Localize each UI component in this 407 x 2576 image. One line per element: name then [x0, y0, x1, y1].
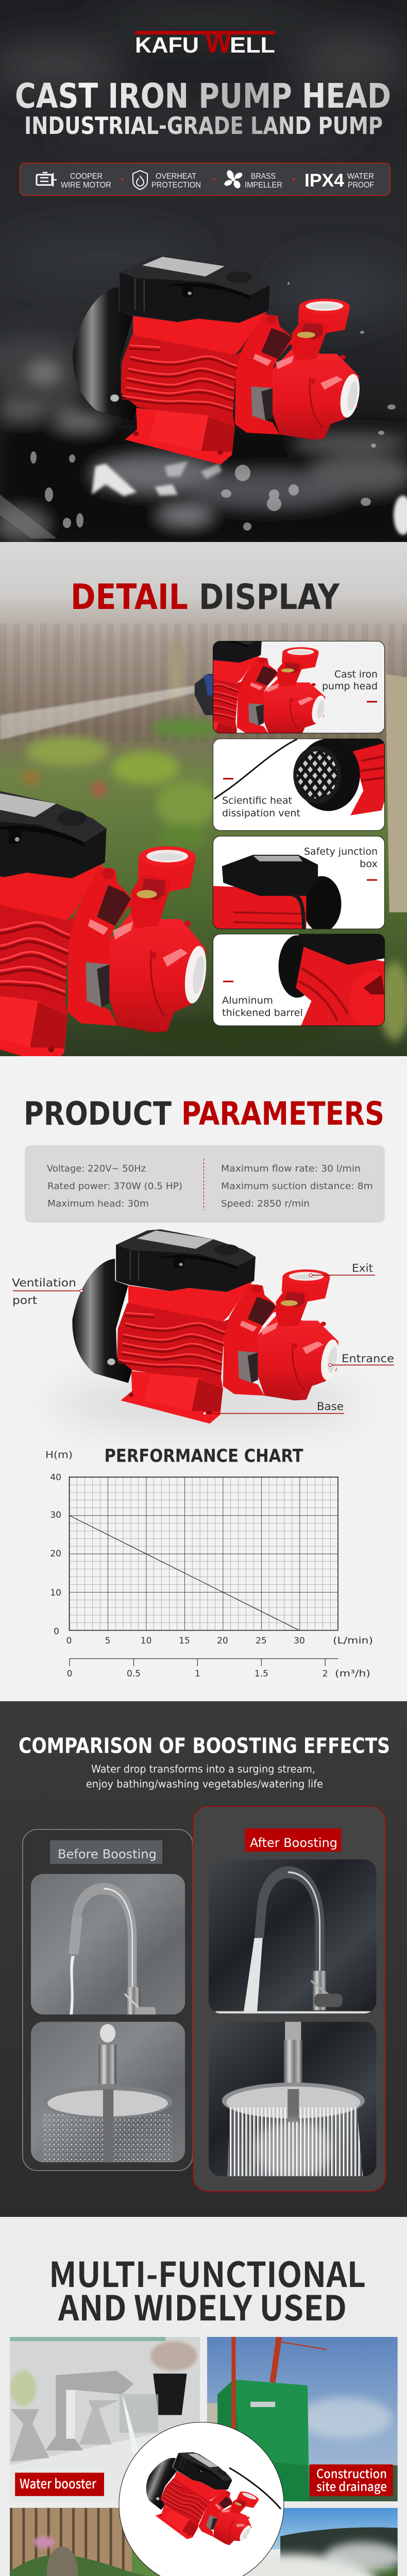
- label: cooper wire motor: COOPER: [70, 172, 103, 181]
- tag: before boosting: Before Boosting: [58, 1847, 157, 1861]
- icon: shield flame: [133, 171, 147, 190]
- close-up pump: [0, 789, 210, 1065]
- callout: base: [203, 1400, 344, 1415]
- performance chart: 5: [105, 1636, 110, 1646]
- label: brass impeller: IMPELLER: [245, 181, 282, 190]
- parameters section: [0, 1056, 407, 1701]
- detail section: [0, 542, 407, 1065]
- tag: after boosting: [245, 1828, 341, 1852]
- detail card: safety junction box: Safety junction: [304, 846, 378, 857]
- callout: ventilation port: Ventilation: [12, 1277, 76, 1289]
- label: IPX4 waterproof: WATER: [347, 172, 374, 181]
- comparison subtitle: Water drop transforms into a surging stream,: [91, 1763, 315, 1775]
- performance chart: 1.5: [255, 1669, 268, 1679]
- photo: irrigation: [244, 2508, 398, 2576]
- chart title: PERFORMANCE CHART: [104, 1446, 303, 1466]
- callout: ventilation port: port: [12, 1294, 37, 1307]
- detail card: cast iron pump head: pump head: [322, 681, 378, 692]
- callout: exit: Exit: [352, 1262, 373, 1275]
- specification box: [25, 1145, 385, 1223]
- hero pump: [73, 256, 363, 465]
- detail card: heat dissipation vent: Scientific heat: [222, 795, 292, 806]
- panel: before boosting: [23, 1829, 193, 2171]
- specification box: Voltage: 220V~ 50Hz: [47, 1164, 146, 1174]
- detail card: aluminum barrel: Aluminum: [222, 995, 273, 1006]
- comparison subtitle: enjoy bathing/washing vegetables/watering life: [86, 1777, 323, 1790]
- logo: KAFU: [135, 33, 199, 58]
- photo: construction site: [207, 2337, 398, 2501]
- label: cooper wire motor: WIRE MOTOR: [61, 181, 111, 190]
- performance chart: 30: [294, 1636, 305, 1646]
- label text: construction site drainage: Construction: [316, 2464, 387, 2482]
- label: brass impeller: BRASS: [251, 172, 276, 181]
- callout: entrance: [329, 1352, 394, 1366]
- before faucet image: [31, 1874, 185, 2017]
- applications title: [49, 2247, 366, 2331]
- photo: pond: [10, 2508, 160, 2576]
- tag: before boosting: [50, 1840, 162, 1864]
- comparison subtitle: [86, 1763, 323, 1790]
- performance chart: (L/min): [333, 1635, 373, 1646]
- detail card: cast iron pump head: Cast iron: [334, 669, 378, 680]
- detail title: DETAIL: [71, 577, 188, 618]
- detail card: safety junction box: box: [360, 858, 378, 870]
- detail card: heat dissipation vent: dissipation vent: [222, 808, 300, 819]
- callout: exit: [309, 1262, 375, 1277]
- detail card: heat dissipation vent: [213, 739, 385, 831]
- after faucet image: [209, 1859, 377, 2013]
- center pump circle: [119, 2422, 284, 2576]
- performance chart: 25: [256, 1636, 267, 1646]
- label: overheat protection: OVERHEAT: [156, 172, 196, 181]
- specification box: Maximum suction distance: 8m: [221, 1181, 373, 1192]
- detail title: DISPLAY: [199, 577, 340, 618]
- callout: entrance: Entrance: [342, 1352, 394, 1365]
- annotated pump: [12, 1229, 394, 1430]
- hero section: [0, 0, 407, 542]
- logo: [135, 26, 275, 59]
- performance chart: 30: [50, 1510, 61, 1520]
- applications title: MULTI-FUNCTIONAL: [49, 2247, 366, 2297]
- performance chart: 20: [50, 1549, 61, 1559]
- garden post: [385, 674, 407, 912]
- nozzle: [195, 674, 214, 715]
- performance chart: (m³/h): [335, 1668, 370, 1679]
- performance chart: 10: [141, 1636, 151, 1646]
- detail card: cast iron pump head: [213, 641, 385, 734]
- performance chart: [45, 1446, 373, 1679]
- performance chart: 0: [67, 1669, 72, 1679]
- photo: water booster faucet: [10, 2337, 200, 2501]
- feature band: [20, 163, 391, 196]
- comparison section: [0, 1701, 407, 2217]
- label: water booster: [15, 2472, 104, 2496]
- water spray: [0, 686, 195, 740]
- performance chart: 0.5: [127, 1669, 141, 1679]
- detail title: [71, 577, 340, 618]
- panel: after boosting: [193, 1806, 385, 2192]
- parameters title: PRODUCT: [24, 1095, 172, 1132]
- label: cooper wire motor: [61, 172, 111, 190]
- before shower image: [31, 2022, 185, 2163]
- tag: after boosting: After Boosting: [250, 1836, 337, 1850]
- performance chart: H(m): [45, 1449, 73, 1461]
- rock highlights: [92, 461, 407, 535]
- label: construction: [310, 2464, 393, 2496]
- performance chart: 2: [323, 1669, 328, 1679]
- wet rock foreground: [0, 282, 407, 542]
- label text: construction site drainage: site drainage: [316, 2477, 387, 2495]
- logo: ELL: [230, 33, 275, 58]
- detail card: aluminum barrel: thickened barrel: [222, 1007, 303, 1019]
- performance chart: 0: [66, 1636, 72, 1646]
- callout: base: Base: [317, 1400, 344, 1413]
- label: brass impeller: [245, 172, 282, 190]
- label: overheat protection: [151, 172, 201, 190]
- callout: ventilation port: [12, 1277, 83, 1307]
- label text: water booster: Water booster: [20, 2474, 97, 2493]
- label text: construction site drainage: [316, 2464, 387, 2495]
- parameters title: [24, 1095, 384, 1132]
- icon: impeller: [224, 169, 243, 190]
- specification box: Maximum head: 30m: [47, 1199, 149, 1209]
- performance chart: 40: [50, 1472, 61, 1483]
- icon: motor: [37, 173, 57, 187]
- label: IPX4 waterproof: PROOF: [348, 181, 374, 190]
- performance chart: 1: [195, 1669, 200, 1679]
- applications title: AND WIDELY USED: [58, 2281, 347, 2331]
- detail card: safety junction box: [213, 836, 384, 932]
- label: IPX4 waterproof: [304, 171, 374, 191]
- performance chart: 15: [179, 1636, 190, 1646]
- specification box: Speed: 2850 r/min: [221, 1199, 310, 1209]
- label: IPX4 waterproof: IPX4: [304, 171, 345, 191]
- logo: W: [205, 26, 232, 59]
- performance chart: 20: [217, 1636, 228, 1646]
- applications section: [10, 2261, 398, 2576]
- specification box: Maximum flow rate: 30 l/min: [221, 1164, 361, 1174]
- detail card: aluminum barrel: [213, 934, 385, 1026]
- after shower image: [209, 2022, 377, 2179]
- performance chart: 10: [50, 1588, 61, 1598]
- performance chart: 0: [54, 1626, 59, 1637]
- label: overheat protection: PROTECTION: [151, 181, 201, 190]
- specification box: Rated power: 370W (0.5 HP): [47, 1181, 182, 1192]
